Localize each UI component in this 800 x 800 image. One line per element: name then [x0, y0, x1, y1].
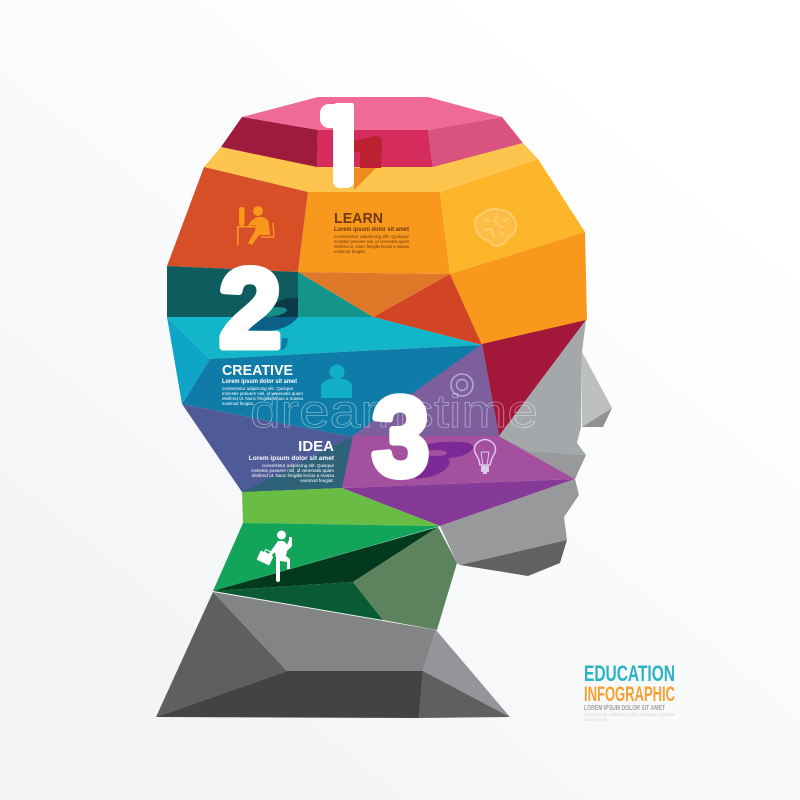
text block: creative: molestie posuere nisl, id venenatis quam [222, 391, 303, 396]
text block: idea: euismod feugiat. [300, 478, 334, 483]
icon: running businessman [257, 530, 292, 582]
neck: green section [213, 488, 457, 630]
title: education infographic: INFOGRAPHIC [584, 683, 675, 706]
head: orange learn section [167, 159, 587, 345]
text block: idea: Lorem ipsum dolor sit amet [249, 455, 335, 462]
text block: learn: consectetur adipiscing elit. Quisque [334, 234, 409, 239]
text block: learn: euismod feugiat. [334, 249, 366, 254]
text block: creative: CREATIVE [222, 362, 293, 379]
number 1: 1 [309, 81, 374, 211]
title: education infographic [584, 661, 676, 722]
text block: learn [334, 211, 410, 254]
watermark: dreamstime [250, 385, 538, 437]
head: crown band [204, 97, 538, 192]
number 3: 3 [372, 374, 429, 499]
title: education infographic: posuere nisl. [584, 717, 608, 722]
face: gray profile [440, 320, 612, 576]
title: education infographic: consectetur adipiscing elit. Quisque molestie [584, 712, 676, 717]
text block: learn: molestie posuere nisl, id venenatis quam [334, 239, 409, 244]
text block: creative: consectetur adipiscing elit. Quisque [222, 386, 293, 391]
head: teal and blue creative section [167, 266, 482, 437]
watermark [250, 374, 538, 437]
number shadows [245, 136, 473, 479]
shoulders: gray polygons [156, 592, 510, 718]
text block: learn: LEARN [334, 211, 383, 227]
text block: creative: Lorem ipsum dolor sit amet [222, 378, 298, 385]
icon: person bust [321, 364, 352, 398]
text block: idea: eleifend ut. Nunc fringilla lectus a massa [252, 473, 334, 478]
text block: learn: Lorem ipsum dolor sit amet [334, 226, 410, 233]
text block: creative: euismod feugiat. [222, 401, 254, 406]
title: education infographic: LOREM IPSUM DOLOR SIT AMET [584, 705, 666, 712]
text block: creative: eleifend ut. Nunc fringilla lectus a massa [222, 396, 303, 401]
title: education infographic: EDUCATION [584, 661, 675, 686]
text block: idea: molestie posuere nisl, id venenatis quam [251, 468, 334, 473]
number 1 [320, 103, 354, 188]
icon: brain [475, 209, 516, 246]
icon: light bulb [474, 440, 496, 474]
text block: idea: IDEA [298, 438, 334, 455]
text block: idea [249, 438, 335, 483]
icon: person at computer [237, 206, 274, 245]
text block: idea: consectetur adipiscing elit. Quisque [262, 463, 334, 468]
number 2: 2 [219, 246, 281, 371]
head: purple idea section [182, 320, 586, 526]
text block: learn: eleifend ut. Nunc fringilla lectus a massa [334, 244, 409, 249]
text block: creative [222, 362, 303, 406]
